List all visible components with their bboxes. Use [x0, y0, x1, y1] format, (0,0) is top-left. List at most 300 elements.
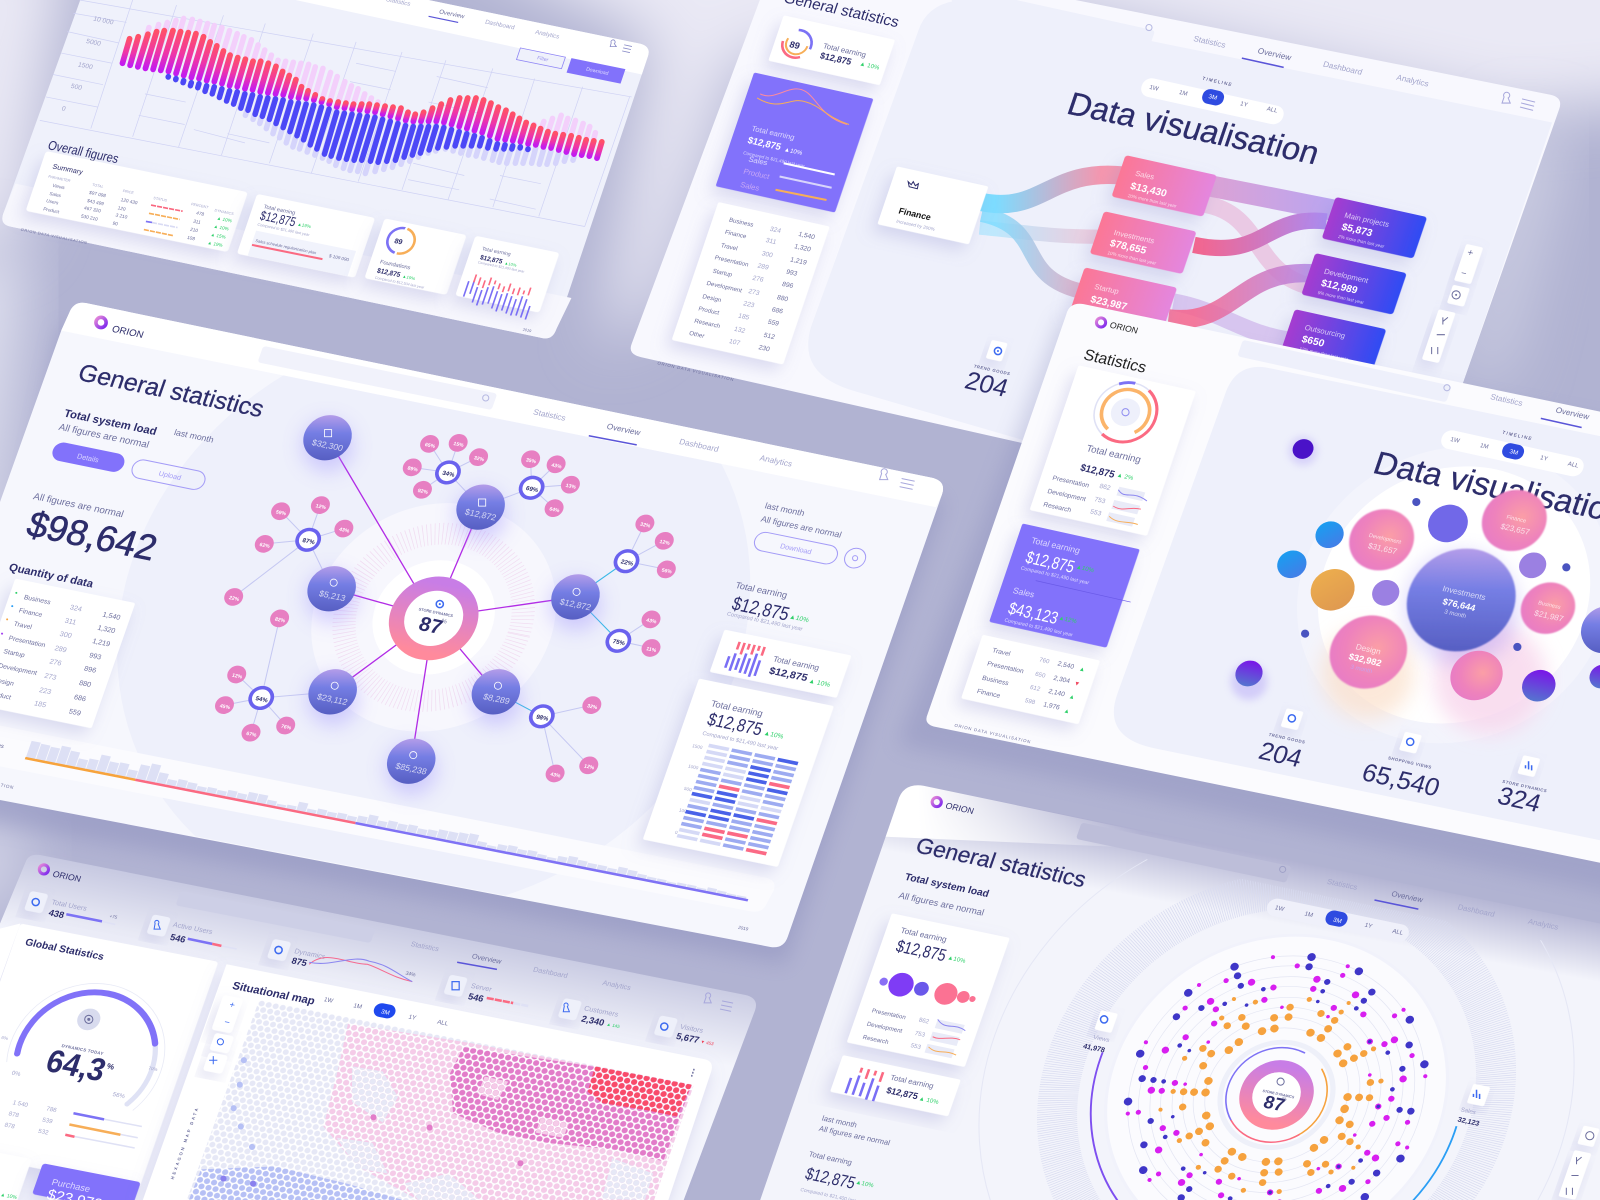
histogram — [25, 740, 754, 900]
stat: visitors: Visitors — [679, 1023, 705, 1035]
card: purple earning: Sales — [739, 180, 761, 193]
node: development: Development — [1323, 267, 1370, 285]
card: summary table: 3 210 — [115, 213, 128, 220]
card: summary table: PARAMETER — [48, 175, 71, 183]
card: heat table: 1000 — [687, 764, 699, 770]
center ring — [387, 578, 480, 659]
card: purple totals: Sales — [1012, 585, 1037, 600]
text: download note: All figures are normal — [760, 514, 843, 540]
card: foundations: Foundations — [379, 259, 411, 271]
leaf values: 67% — [245, 731, 258, 739]
search bar — [951, 0, 1155, 46]
card: global statistics: 6% — [1, 1035, 9, 1041]
timeline selector: TIMELINE — [1502, 430, 1533, 441]
stat: views: 41,978 — [1082, 1042, 1106, 1054]
card: data table: Business — [23, 594, 52, 606]
ring node values: 54% — [254, 695, 269, 704]
leaf values — [219, 441, 673, 780]
card: business table: Product — [697, 305, 720, 317]
stat: server: 546 — [467, 991, 485, 1004]
gauge icon — [74, 1007, 103, 1032]
card: data table: 993 — [88, 651, 102, 661]
tabs: Dashboard — [484, 19, 516, 31]
stat: total users: 438 — [47, 908, 66, 920]
panel surface — [631, 0, 1560, 454]
stat: dynamics: Dynamics — [293, 947, 327, 961]
card: global statistics: Global Statistics — [23, 937, 106, 963]
footer labels: ORION DATA VISUALISATION — [20, 227, 88, 245]
card: heat table: Total earning — [710, 699, 764, 719]
node: main projects: $5,873 — [1340, 222, 1374, 239]
card: purple earning: Sales — [747, 155, 769, 167]
footer labels: 2019 — [522, 327, 532, 333]
text: last month: last month — [821, 1114, 858, 1130]
card: business table: Presentation — [714, 254, 749, 268]
button: upload: Upload — [158, 470, 182, 482]
card: business table: 132 — [733, 326, 746, 335]
card: bars earning: ▲ 10% — [808, 678, 831, 689]
sphere: 5,213: $5,213 — [318, 588, 347, 603]
card: foundations: Compared to $12,504 last year — [374, 276, 425, 290]
tabs: Analytics — [1395, 73, 1430, 88]
bubble chart backdrop — [1256, 417, 1600, 772]
leaf values: 12% — [315, 503, 327, 511]
node: sales: 20% more than last year — [1127, 193, 1178, 209]
sphere: development: $31,657 — [1367, 541, 1399, 556]
sphere: 32,300 — [297, 411, 358, 471]
card: earning ring: $12,875 — [819, 51, 853, 67]
sphere: 12,872 right — [545, 570, 606, 631]
heading: quantity of data: Quantity of data — [7, 562, 96, 590]
card: earning ring: Total earning — [822, 41, 867, 59]
tabs: Overview — [1554, 406, 1591, 421]
card: total earning bars — [455, 236, 560, 320]
axis labels: 1500 — [77, 62, 94, 71]
stat: views: Views — [1092, 1034, 1110, 1044]
card: data table: 311 — [64, 617, 77, 627]
center value: % — [440, 618, 448, 626]
leaf values: 11% — [645, 646, 657, 654]
tabs: Analytics — [759, 454, 793, 469]
hexagon map — [187, 1000, 694, 1200]
magenta links — [328, 438, 576, 761]
card: summary table: Sales — [49, 191, 62, 198]
text: total system load: Total system load — [903, 872, 990, 900]
content area — [808, 1, 1552, 454]
card: regions table: 760 — [1038, 656, 1051, 665]
card: regions table: Finance — [976, 688, 1001, 700]
rings and ticks — [279, 482, 589, 753]
zoom controls: + — [1465, 248, 1475, 259]
logo: ORION — [51, 869, 83, 884]
tabs: Dashboard — [678, 437, 720, 454]
card: business table: Research — [693, 318, 721, 330]
card: data table: 324 — [69, 604, 83, 613]
zoom controls — [1422, 244, 1483, 363]
stat: total earning: Compared to $21,490 last year — [726, 612, 803, 633]
card: summary table: ▲ 10% — [216, 216, 233, 223]
panel: hexagon situational map — [0, 855, 756, 1200]
panel surface — [0, 855, 756, 1200]
center value: 87 — [1261, 1091, 1288, 1115]
card: total earning rings: Research — [1042, 501, 1072, 514]
cyan links — [496, 561, 627, 716]
sphere: design — [1319, 608, 1417, 696]
sphere: 12,872 right: $12,872 — [559, 597, 593, 612]
card: business table: 107 — [728, 338, 741, 347]
card: purple earning: ▲10% — [783, 146, 804, 157]
node: investments: $78,655 — [1108, 238, 1148, 257]
card: regions table: 598 — [1024, 697, 1037, 706]
card: total earning bars: Compared to $21,490 last year — [477, 260, 526, 274]
card: total earning rings: Development — [1046, 488, 1087, 503]
leaf values: 45% — [219, 703, 231, 711]
orange dots — [1129, 966, 1424, 1200]
tab underline — [457, 962, 497, 969]
navy dots — [1088, 930, 1465, 1200]
ring node values — [254, 470, 635, 723]
tabs: Statistics — [1192, 34, 1227, 50]
node: outsourcing: 12% more than last year — [1299, 346, 1349, 362]
stat: server — [443, 974, 529, 1006]
text: total system load: Total system load — [62, 408, 158, 438]
map timeline: 3M — [380, 1009, 391, 1017]
leaf values: 65% — [424, 442, 436, 450]
footer label: ORION DATA VISUALISATION — [657, 360, 735, 382]
leaf values: 32% — [473, 455, 485, 463]
button: details — [50, 441, 127, 474]
panel surface — [926, 304, 1600, 869]
timeline selector: 1Y — [1539, 454, 1549, 463]
card: global statistics: 0% — [11, 1070, 22, 1078]
card: global statistics: 786 — [45, 1105, 58, 1114]
card: business table: 289 — [757, 263, 770, 272]
logo: ORION — [1109, 320, 1139, 336]
card: total earning: Total earning — [263, 204, 296, 216]
heading: general statistics: General statistics — [75, 360, 267, 423]
stat: visitors: ▼ 453 — [700, 1039, 715, 1046]
stat: customers — [558, 998, 621, 1029]
card: business table: 273 — [747, 288, 761, 297]
map timeline: 1M — [352, 1002, 363, 1011]
leaf values: 12% — [231, 673, 243, 681]
card: purple totals: Compared to $21,490 last year — [1003, 618, 1074, 638]
card: business table: 230 — [758, 344, 771, 353]
stat: trend goods — [1255, 708, 1306, 773]
card: total earning rings: ▲ 2% — [1116, 472, 1135, 482]
card: business table: 512 — [763, 332, 776, 341]
card: summary table: Product — [43, 206, 61, 215]
node: outsourcing — [1281, 309, 1386, 371]
card: summary table: 530 210 — [80, 214, 99, 222]
card: summary table: Summary — [51, 163, 84, 176]
node: main projects — [1322, 197, 1427, 259]
card: total earning: $ 109 090 — [328, 253, 350, 262]
card: business table: 686 — [771, 306, 784, 316]
stat: sales — [1456, 1084, 1490, 1128]
card: business table: Development — [705, 280, 743, 294]
timeline selector: 1Y — [1364, 922, 1373, 930]
search bar — [176, 891, 376, 943]
tabs — [1326, 877, 1560, 932]
timeline selector: 1W — [1148, 84, 1160, 93]
text: last month — [818, 1114, 892, 1147]
card: purple totals: ▲10% — [1075, 564, 1096, 574]
card: bars earning: Total earning — [889, 1073, 935, 1090]
node: outsourcing: $650 — [1300, 334, 1326, 350]
leaf values: 12% — [583, 764, 595, 771]
sphere: investments — [1393, 538, 1530, 664]
total value: $98,642 — [22, 504, 162, 568]
card: summary table: Users — [46, 198, 60, 206]
card: business table: 896 — [781, 281, 794, 290]
panel: bubbles statistics — [898, 304, 1600, 898]
card: business table: 880 — [776, 294, 789, 303]
stat: trend goods: 204 — [1255, 737, 1306, 773]
footer histogram band — [0, 726, 774, 912]
sphere: 32,300: $32,300 — [311, 437, 345, 453]
tabs: Overview — [1257, 46, 1293, 62]
tabs: Statistics — [532, 408, 567, 423]
ring node values: 34% — [441, 470, 456, 479]
card: total earning rings: 862 — [1098, 483, 1112, 492]
tabs — [385, 0, 560, 40]
card: purple totals: $43,123 — [1006, 598, 1061, 628]
zoom controls: − — [1460, 268, 1468, 279]
heading: statistics: Statistics — [1081, 347, 1149, 377]
node: startup: Startup — [1093, 282, 1120, 296]
blue series — [168, 77, 528, 162]
heat grid — [677, 745, 798, 854]
panel: radial dot chart — [760, 764, 1600, 1200]
card: data table: 273 — [43, 672, 58, 682]
stat: trend goods: TREND GOODS — [973, 364, 1011, 376]
stat: dynamics: 875 — [290, 956, 308, 968]
card: summary table — [26, 151, 248, 252]
card: global statistics: 539 — [41, 1117, 54, 1125]
card: foundations — [364, 218, 467, 295]
card: bubbles earning: Total earning — [899, 926, 949, 944]
card: bubbles earning: Development — [866, 1021, 904, 1035]
card: total earning: Sales schedule regularization plan — [255, 238, 317, 255]
card: purple earning — [716, 72, 873, 213]
leaf values: 62% — [259, 542, 271, 550]
card: business table: Business — [728, 217, 754, 229]
stat: shopping views — [1358, 732, 1443, 802]
tabs: Overview — [1390, 889, 1425, 904]
chart grid — [40, 0, 632, 227]
ring node values: 22% — [620, 559, 635, 568]
stat: shopping views: SHOPPING VIEWS — [1387, 755, 1433, 770]
card: data table: 223 — [38, 686, 52, 696]
network chart — [212, 411, 678, 795]
leaf values: 12% — [659, 539, 671, 547]
card: purchase: Purchase — [50, 1177, 92, 1194]
stat: total earning — [799, 1150, 875, 1200]
button: details: Details — [76, 452, 100, 464]
tab underline — [1374, 900, 1418, 909]
stat: dynamics: 34% — [404, 971, 417, 978]
search bar — [1076, 822, 1292, 883]
card: bubbles earning: 862 — [918, 1017, 931, 1026]
stat: store dynamics: 324 — [1494, 782, 1544, 818]
card: business table: Finance — [724, 229, 748, 240]
card: data table: Startup — [2, 648, 26, 659]
axis labels: 0 — [61, 105, 67, 113]
text: download note: last month — [764, 501, 806, 518]
card: earning ring: ▲ 10% — [859, 61, 881, 72]
map controls: − — [223, 1017, 231, 1027]
text: figures normal: All figures are normal — [57, 422, 150, 451]
header strip — [61, 303, 943, 507]
leaf values: 64% — [548, 506, 561, 514]
card: total earning rings — [1030, 365, 1196, 536]
sphere: business — [1514, 577, 1582, 639]
axis labels: 500 — [70, 83, 83, 92]
histogram baseline — [25, 758, 135, 780]
node: finance: Increased by 200% — [896, 219, 935, 232]
card: bubbles earning: Research — [862, 1034, 890, 1046]
stat: trend goods: TREND GOODS — [1268, 732, 1306, 745]
tabs: Dashboard — [1322, 60, 1364, 77]
card: summary table: 108 — [186, 235, 196, 241]
card: total earning rings: Total earning — [1085, 443, 1142, 466]
stat: total users: +75 — [109, 914, 119, 920]
leaf values: 43% — [549, 772, 562, 780]
button: upload — [129, 458, 208, 491]
button: download — [752, 531, 840, 566]
search bar — [258, 346, 497, 410]
card: bubbles earning: 753 — [914, 1030, 927, 1039]
stat: store dynamics — [1494, 755, 1548, 818]
center value — [1261, 1078, 1295, 1115]
node: startup — [1070, 267, 1177, 330]
card: bars earning: Total earning — [772, 655, 821, 673]
stat: visitors: 5,677 — [675, 1031, 701, 1045]
leaf values: 13% — [565, 483, 577, 491]
tabs — [410, 940, 632, 992]
panel surface — [2, 0, 649, 338]
card: summary table: 120 — [117, 205, 127, 212]
header icons — [1502, 92, 1535, 110]
leaf values: 56% — [661, 568, 673, 575]
stat: total earning — [726, 580, 810, 633]
tabs: Dashboard — [532, 966, 569, 980]
node: development: 9% more than last year — [1317, 290, 1365, 305]
stat: total earning: Total earning — [734, 580, 789, 600]
card: heat table: ▲10% — [763, 730, 784, 741]
leaf values: 92% — [417, 488, 429, 496]
leaf values: 76% — [280, 724, 292, 732]
axis labels — [61, 16, 115, 113]
sphere: design: 3 month — [1349, 664, 1373, 675]
card: bars earning: $12,875 — [767, 666, 809, 684]
card: purple earning: Compared to $21,490 last year — [743, 150, 806, 169]
card: summary table: DYNAMICS — [214, 208, 235, 216]
card: data table: 289 — [53, 644, 68, 654]
card: foundations: ▲19% — [402, 274, 416, 281]
tabs: Overview — [605, 422, 642, 437]
tabs: Statistics — [410, 940, 441, 953]
panel: sankey data visualisation — [631, 0, 1560, 454]
sphere: 23,112: $23,112 — [316, 691, 349, 707]
search icon — [1146, 24, 1152, 31]
node: development — [1301, 253, 1407, 315]
sphere: 85,238 — [380, 734, 442, 795]
stat: trend goods: 204 — [961, 367, 1012, 403]
tab underline — [589, 436, 637, 445]
card: total earning — [237, 194, 375, 278]
map menu — [692, 1069, 694, 1076]
sphere: development: Development — [1368, 533, 1402, 546]
node: outsourcing: Outsourcing — [1303, 323, 1347, 340]
card: summary table: ▲ 10% — [213, 224, 230, 232]
sphere: 23,112 — [302, 665, 363, 726]
card: global statistics: DYNAMICS TODAY — [61, 1043, 104, 1056]
sphere: 12,872 top — [450, 480, 511, 541]
card: global statistics: 878 — [8, 1111, 20, 1119]
card: business table: 276 — [751, 275, 765, 284]
node: finance: Finance — [897, 206, 933, 222]
card: data table: 880 — [78, 679, 92, 689]
card: business table: 993 — [785, 269, 798, 278]
timeline selector: 3M — [1332, 917, 1343, 925]
card: situational map — [143, 964, 712, 1200]
tabs: Analytics — [1527, 917, 1560, 932]
sphere: investments: Investments — [1441, 584, 1487, 602]
stat: customers: ▲ 145 — [606, 1022, 621, 1029]
magenta dots — [1088, 930, 1465, 1200]
map controls — [203, 995, 243, 1074]
tabs: Statistics — [1326, 877, 1359, 892]
text: figures normal: All figures are normal — [897, 890, 985, 918]
card: summary table: PRICE — [122, 189, 135, 195]
card: business table — [672, 202, 830, 365]
node: sales: Sales — [1134, 169, 1156, 182]
logo — [39, 865, 83, 884]
card: business table: Travel — [720, 242, 738, 252]
title: data visualisation: Data visualisation — [1063, 86, 1324, 171]
map timeline — [323, 996, 450, 1028]
card: global statistics — [0, 923, 218, 1188]
card: summary table: Views — [52, 183, 66, 190]
stat: sales: 32,123 — [1456, 1116, 1481, 1128]
card: summary table: 120 430 — [120, 197, 139, 205]
center value: % — [1281, 1096, 1288, 1103]
stat: total earning: ▲10% — [854, 1179, 875, 1189]
ring node values: 69% — [525, 485, 540, 494]
sphere: business: Business — [1537, 600, 1561, 611]
stat: customers: 2,340 — [580, 1014, 606, 1028]
node: main projects: 2% more than last year — [1337, 234, 1385, 249]
card: bars earning — [710, 630, 851, 698]
card: summary table: $97 098 — [88, 190, 107, 198]
header strip — [291, 0, 649, 74]
ring node values: 87% — [301, 537, 316, 546]
sphere: 12,872 top: $12,872 — [464, 507, 498, 522]
card: global statistics: 70% — [148, 1066, 158, 1072]
stat: active users: 546 — [169, 932, 187, 945]
card: total earning: Compared to $21,490 last year — [257, 222, 311, 237]
timeline selector — [1139, 76, 1286, 126]
histogram bars — [31, 741, 747, 898]
card: regions table: 2,540 — [1057, 661, 1075, 671]
ring node values: 75% — [612, 638, 626, 647]
map controls — [1558, 1126, 1600, 1200]
leaf values: 22% — [228, 595, 240, 603]
sankey ribbons — [980, 175, 1339, 342]
footer labels — [0, 742, 749, 932]
